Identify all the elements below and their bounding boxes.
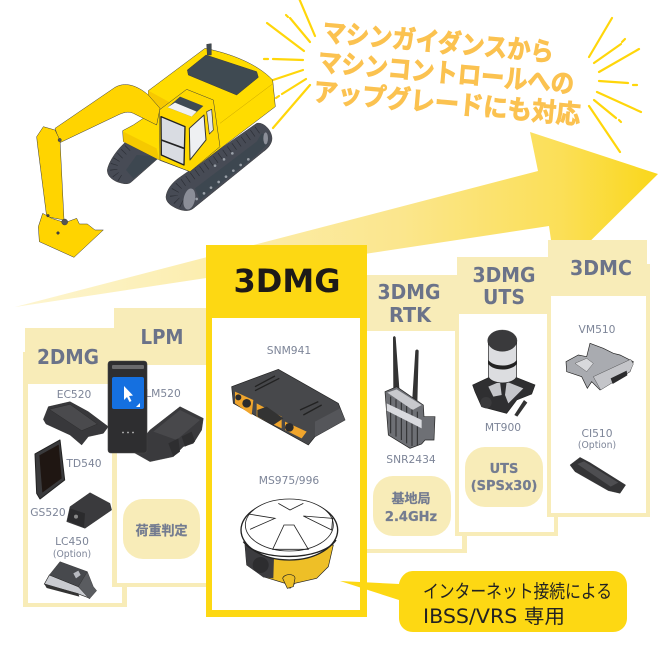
label: LC450 option: (Option) [53,549,91,560]
panel: 3DMG highlighted [206,245,367,617]
device: MS975/996 [241,499,338,588]
boom [55,85,160,143]
cab [159,89,220,172]
pill: load judgement: 荷重判定 [135,523,188,539]
panel: 2DMG [23,328,127,607]
callout: internet connection: IBSS/VRS 専用 [423,605,565,628]
heading: 3DMG UTS: 3DMG [472,263,536,287]
arm [37,127,64,220]
panel: 3DMG UTS [455,257,558,536]
label: LM520: LM520 [145,387,181,400]
heading: 3DMC: 3DMC [570,256,632,280]
title: アップグレードにも対応 [312,77,582,130]
heading: 3DMG RTK: 3DMG [378,280,440,304]
label: SNR2434: SNR2434 [386,453,436,466]
arrow: upgrade direction [15,132,658,307]
label: SNM941: SNM941 [267,344,311,357]
panel: 3DMC [547,240,650,517]
device: SNM941 [232,369,345,445]
pill: load judgement [123,499,200,559]
heading: 3DMG RTK: RTK [389,303,432,327]
pill: base station 2.4GHz [373,476,451,536]
device: VM510 [566,343,633,390]
panel: LPM [112,308,206,587]
label: MS975/996: MS975/996 [259,474,319,487]
pill: base station 2.4GHz: 基地局 [391,491,431,507]
antenna [207,44,211,55]
label: TD540: TD540 [65,457,102,470]
pill: UTS (SPSx30) [465,447,543,507]
device: EC520 [43,402,108,445]
burst rays around title [264,0,641,152]
label: MT900: MT900 [485,421,521,434]
heading: 2DMG: 2DMG [37,345,99,369]
label: EC520: EC520 [57,388,92,401]
label: CI510 option: (Option) [578,440,616,451]
heading: 3DMG UTS [472,263,536,309]
pill: base station 2.4GHz: 2.4GHz [385,510,437,525]
near track [166,123,272,211]
engine hood [187,55,258,95]
upper body [123,48,275,172]
title [312,17,587,130]
label: CI510: CI510 [581,427,613,440]
pill: UTS (SPSx30): (SPSx30) [471,479,537,494]
title: マシンコントロールへの [317,47,575,99]
panel: 3DMG RTK [367,275,467,553]
bucket [38,213,103,257]
far track [107,143,160,184]
icon: phone with cursor [108,361,147,453]
device: LC450 [44,562,97,599]
heading: 3DMG RTK [378,280,440,327]
heading: 3DMG: 3DMG [234,262,340,300]
callout: internet connection: インターネット接続による [423,582,612,603]
device: MT900 [473,330,535,417]
heading: LPM: LPM [140,325,184,349]
device: LM520 [132,407,203,462]
label: LC450: LC450 [55,535,89,548]
device: GS520 [67,493,112,528]
label: GS520: GS520 [30,506,66,519]
title: マシンガイダンスから [321,17,555,67]
heading: 3DMG UTS: UTS [483,285,525,309]
device: CI510 [570,457,626,493]
pill: UTS (SPSx30): UTS [490,462,518,477]
device: SNR2434 [385,336,435,448]
device: TD540 [35,440,65,499]
label: VM510: VM510 [579,323,616,336]
callout: internet connection [340,571,627,632]
excavator illustration [37,44,275,257]
